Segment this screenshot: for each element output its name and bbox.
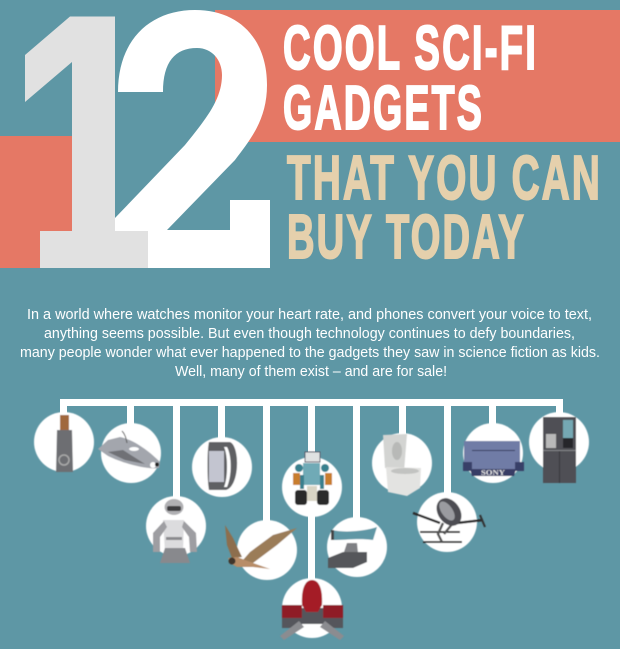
gadget: smart toilet — [372, 433, 432, 496]
gadget: usb dongle — [34, 412, 94, 472]
intro paragraph: anything seems possible. But even though technology continues to defy boundaries, — [44, 325, 575, 342]
intro paragraph: many people wonder what ever happened to the gadgets they saw in science fiction as kids. — [20, 344, 600, 361]
title: cool sci-fi gadgets — [283, 14, 538, 143]
subtitle: that you can buy today — [287, 144, 602, 272]
gadget: submarine drone — [98, 423, 161, 483]
coral block: left — [0, 136, 80, 268]
gadget: sony printer — [463, 423, 524, 483]
gadget: fitness band — [192, 437, 252, 497]
numeral 1 — [25, 16, 148, 268]
gadget: smart refrigerator — [529, 412, 589, 483]
gadget: coding robot kit — [282, 452, 342, 517]
connector tree — [60, 399, 563, 594]
coral banner: top — [215, 10, 620, 142]
gadget: jet pack — [280, 578, 344, 640]
title: cool sci-fi gadgets: GADGETS — [283, 74, 484, 143]
intro paragraph — [20, 306, 600, 380]
gadget: humanoid robot — [146, 496, 206, 563]
gadget: bird drone — [225, 520, 297, 580]
intro paragraph: In a world where watches monitor your heart rate, and phones convert your voice to text, — [27, 306, 592, 323]
numeral 2 — [115, 10, 270, 268]
gadget: sony printer: SONY — [481, 469, 505, 477]
gadget: curved screen projector — [327, 517, 387, 577]
intro paragraph: Well, many of them exist – and are for sale! — [175, 363, 447, 380]
gadget: passenger drone — [413, 492, 485, 552]
